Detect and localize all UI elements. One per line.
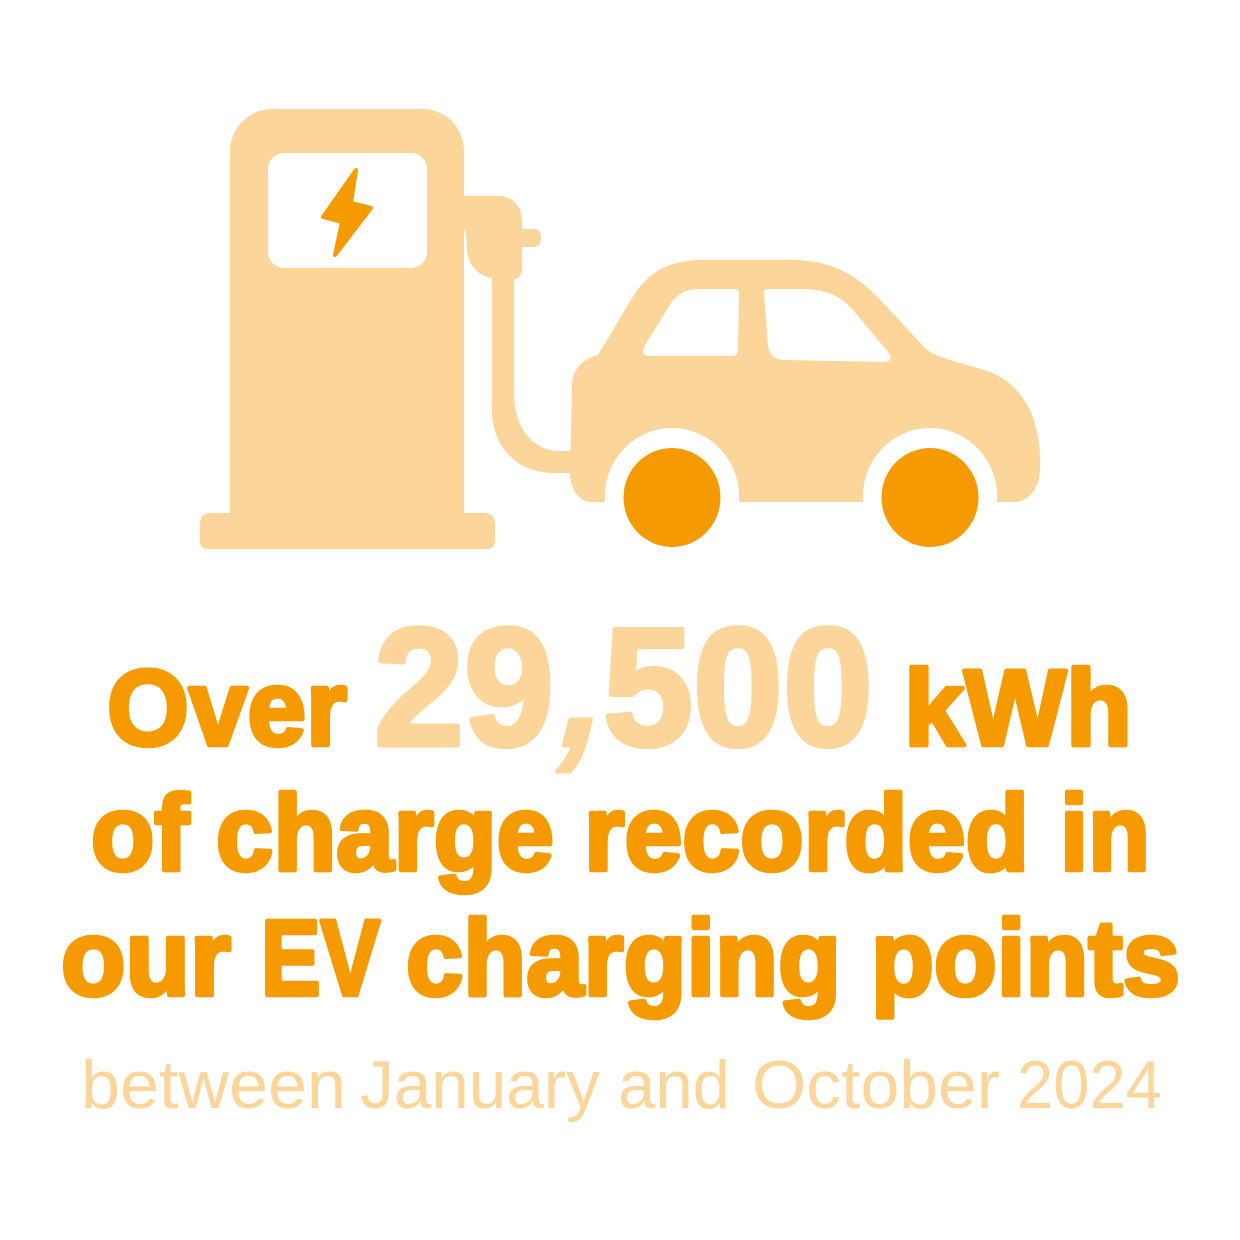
line 3: our EV charging points: our: [61, 897, 231, 1018]
subheading: date range: 2024: [1017, 1047, 1162, 1123]
line 3: our EV charging points: EV: [261, 897, 380, 1018]
icon: car: [570, 260, 1040, 547]
line 1: Over 29,500 kWh: 500: [603, 593, 873, 781]
line 1: Over 29,500 kWh: 29: [374, 593, 554, 781]
icon: rear wheel: [882, 448, 978, 547]
line 2: of charge recorded in: charge: [216, 772, 554, 893]
line 1: Over 29,500 kWh: ,: [545, 594, 632, 781]
line 3: our EV charging points: points: [871, 897, 1180, 1018]
line 3: our EV charging points: charging: [406, 897, 841, 1018]
subheading: date range: [81, 1047, 1162, 1123]
line 2: of charge recorded in: in: [1060, 772, 1150, 893]
line 1: Over 29,500 kWh: Over: [107, 647, 347, 768]
subheading: date range: January: [360, 1047, 600, 1123]
subheading: date range: October: [752, 1047, 1000, 1123]
line 1: Over 29,500 kWh: [107, 593, 1132, 781]
icon: charging pump and car: [200, 109, 1040, 549]
icon: charging pump: [200, 109, 495, 549]
icon: front wheel: [624, 448, 720, 547]
line 2: of charge recorded in: of: [91, 772, 190, 893]
line 1: Over 29,500 kWh: kWh: [904, 647, 1132, 768]
subheading: date range: and: [618, 1047, 730, 1123]
line 2: of charge recorded in: [91, 772, 1150, 893]
headline: [61, 593, 1180, 1018]
subheading: date range: between: [81, 1047, 346, 1123]
icon: plug and cable: [464, 196, 572, 473]
line 3: our EV charging points: [61, 897, 1180, 1018]
line 2: of charge recorded in: recorded: [584, 772, 1029, 893]
